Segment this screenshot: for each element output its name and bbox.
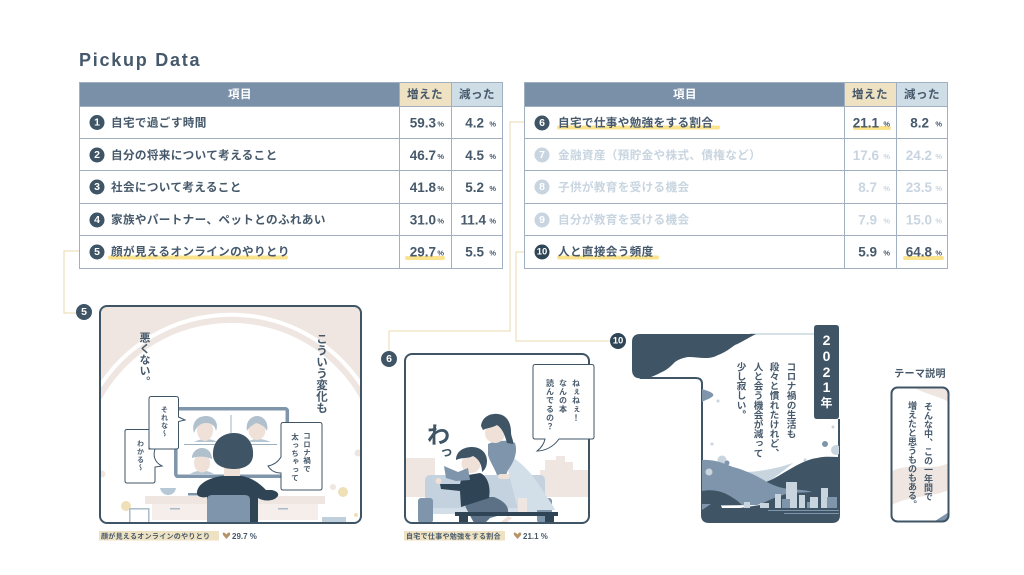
tab: 2021年 bbox=[814, 325, 839, 419]
row 5: 顔が見えるオンラインのやりとり bbox=[111, 244, 290, 258]
panel: theme bbox=[892, 367, 949, 522]
row 4: 31.0 bbox=[410, 212, 436, 228]
cup bbox=[518, 498, 527, 512]
speech bubble: なんの本 bbox=[558, 379, 568, 414]
speech bubble: わかる bbox=[125, 430, 162, 483]
desk bbox=[145, 496, 325, 520]
tab: 2021年: 年 bbox=[820, 395, 833, 410]
speech bubble: 読んでるの？ bbox=[546, 378, 554, 431]
badge 6 bbox=[381, 351, 397, 367]
row 1: % bbox=[437, 120, 444, 128]
speech bubble: ねぇねぇ！ bbox=[572, 379, 580, 422]
tab: 2021年: 0 bbox=[823, 348, 831, 364]
row 4: % bbox=[437, 216, 444, 226]
row 8: 子供が教育を受ける機会 bbox=[558, 180, 689, 194]
tab: 2021年: 2 bbox=[823, 332, 831, 348]
row 5 bbox=[90, 244, 496, 260]
speech bubble: それな bbox=[149, 396, 185, 449]
row 10 bbox=[534, 244, 942, 260]
row 3: % bbox=[489, 184, 496, 193]
connector lines bbox=[64, 122, 610, 351]
badge 6: 6 bbox=[386, 353, 392, 365]
highlight: rows 6 and 10 bbox=[557, 126, 944, 260]
table: left bbox=[80, 82, 502, 268]
row 6: 21.1 bbox=[853, 116, 879, 130]
row 10: % bbox=[935, 248, 942, 258]
table: right: 項目 bbox=[673, 88, 697, 101]
table: left: 項目 bbox=[228, 88, 252, 101]
tab: 2021年: 1 bbox=[823, 379, 831, 395]
decorative dots bbox=[101, 470, 106, 478]
caption: 顔が見えるオンラインのやりとり bbox=[101, 532, 210, 540]
row 1: % bbox=[489, 120, 496, 128]
row 6: 8.2 bbox=[910, 116, 929, 130]
row 5: % bbox=[489, 248, 496, 258]
row 8: % bbox=[935, 184, 942, 193]
landscape bbox=[702, 456, 840, 523]
narration text bbox=[734, 361, 796, 458]
speech bubble: それな: それな〜 bbox=[160, 406, 168, 437]
caption: 29.7 % bbox=[232, 532, 257, 541]
narration: こういう変化も: こういう変化も bbox=[315, 333, 328, 414]
row 7: 24.2 bbox=[906, 148, 932, 163]
side box bbox=[130, 509, 149, 525]
row 9: 7.9 bbox=[858, 212, 877, 228]
child bbox=[436, 447, 512, 523]
row 1: 4.2 bbox=[465, 116, 484, 130]
row 10: 10 bbox=[537, 246, 547, 258]
bowl bbox=[160, 488, 176, 495]
row 4 bbox=[90, 212, 496, 228]
row 2: 4.5 bbox=[465, 148, 484, 163]
narration text: 人と会う機会が減って bbox=[752, 362, 763, 458]
row 9: % bbox=[883, 216, 890, 226]
row 10: % bbox=[883, 248, 890, 258]
table: right: 増えた bbox=[852, 87, 888, 101]
dark cloud blob bbox=[632, 334, 756, 378]
speech bubble: わかる: わかる〜 bbox=[136, 440, 144, 471]
speech bubble bbox=[533, 364, 594, 451]
caption: 21.1 % bbox=[523, 532, 548, 541]
row 1 bbox=[90, 115, 496, 130]
beige skyline bbox=[405, 456, 589, 497]
narration text: 段々と慣れたけれど、 bbox=[768, 361, 779, 458]
badge 10: 10 bbox=[613, 336, 623, 346]
row 6: 自宅で仕事や勉強をする割合 bbox=[558, 116, 713, 130]
row 7: 7 bbox=[539, 149, 545, 161]
narration: 悪くない。: 悪くない。 bbox=[138, 332, 150, 387]
narration text: 少し寂しい。 bbox=[734, 361, 746, 420]
table: left: 減った bbox=[459, 87, 495, 101]
row 6: % bbox=[935, 120, 942, 128]
badge 5 bbox=[76, 304, 92, 320]
theme text: そんな中、この一年間で bbox=[923, 402, 933, 501]
row 5: 5 bbox=[94, 246, 100, 258]
row 2: % bbox=[489, 152, 496, 161]
row 8: % bbox=[883, 184, 890, 193]
row 9: 9 bbox=[539, 214, 545, 226]
row 7 bbox=[534, 148, 942, 163]
caption: 自宅で仕事や勉強をする割合 bbox=[406, 532, 501, 540]
row 4: 11.4 bbox=[460, 212, 486, 228]
row 8: 8.7 bbox=[858, 180, 877, 195]
row 10: 64.8 bbox=[906, 244, 932, 260]
row 7: 17.6 bbox=[853, 148, 879, 163]
row 7: % bbox=[883, 152, 890, 161]
panel: manga 5 bbox=[76, 304, 362, 541]
row 6: % bbox=[883, 120, 890, 128]
row 3: 41.8 bbox=[410, 180, 436, 195]
row 3: % bbox=[437, 184, 444, 193]
row 2: 自分の将来について考えること bbox=[111, 148, 278, 162]
frame bbox=[405, 354, 589, 523]
row 3 bbox=[90, 180, 496, 195]
caption bbox=[99, 531, 257, 541]
sound effect: わっ: わ bbox=[427, 422, 450, 448]
row 9 bbox=[534, 212, 942, 228]
badge 5: 5 bbox=[81, 306, 87, 318]
row 2: % bbox=[437, 152, 444, 161]
caption bbox=[404, 531, 548, 541]
monitor bbox=[176, 409, 287, 476]
badge 10 bbox=[610, 333, 626, 349]
row 6: 6 bbox=[539, 117, 545, 129]
coffee table bbox=[455, 512, 558, 522]
row 8 bbox=[534, 180, 942, 195]
frame bbox=[100, 306, 361, 523]
speech bubble: コロナ禍で: 太っちゃって bbox=[290, 432, 300, 482]
row 1: 59.3 bbox=[410, 116, 436, 130]
row 4: 4 bbox=[94, 214, 100, 226]
row 2 bbox=[90, 148, 496, 163]
row 2: 2 bbox=[94, 149, 100, 161]
theme text bbox=[907, 400, 933, 509]
row 9: % bbox=[935, 216, 942, 226]
table: right: 減った bbox=[904, 87, 940, 101]
highlight: row 5 bbox=[108, 256, 445, 260]
row 8: 8 bbox=[539, 181, 545, 193]
panel: manga 6 bbox=[381, 351, 594, 541]
row 8: 23.5 bbox=[906, 180, 932, 195]
row 6 bbox=[534, 116, 942, 130]
row 5: % bbox=[437, 248, 444, 258]
row 4: % bbox=[489, 216, 496, 226]
woman bbox=[481, 414, 555, 510]
tab: 2021年: 2 bbox=[823, 364, 831, 380]
row 9: 15.0 bbox=[906, 212, 932, 228]
row 1: 自宅で過ごす時間 bbox=[111, 116, 207, 130]
person from behind bbox=[197, 433, 278, 524]
theme text: 増えたと思うものもある。 bbox=[907, 400, 917, 509]
table: left: 増えた bbox=[407, 87, 443, 101]
row 4: 家族やパートナー、ペットとのふれあい bbox=[111, 212, 326, 226]
row 3: 5.2 bbox=[465, 180, 484, 195]
row 3: 社会について考えること bbox=[111, 180, 242, 194]
narration text: コロナ禍の生活も bbox=[784, 362, 796, 439]
speech bubble: コロナ禍で bbox=[268, 422, 322, 490]
row 7: 金融資産（預貯金や株式、債権など） bbox=[558, 148, 761, 162]
table: right bbox=[524, 82, 948, 268]
row 2: 46.7 bbox=[410, 148, 436, 163]
row 5: 29.7 bbox=[410, 244, 436, 260]
row 3: 3 bbox=[94, 181, 100, 193]
speech bubble: コロナ禍で: コロナ禍で bbox=[302, 432, 312, 473]
panel: manga 10 bbox=[610, 325, 841, 523]
sound effect: わっ: っ bbox=[440, 444, 453, 459]
sound effect: わっ bbox=[427, 422, 453, 459]
sofa bbox=[418, 475, 552, 523]
city buildings bbox=[744, 482, 839, 514]
row 5: 5.5 bbox=[465, 244, 484, 260]
row 10: 人と直接会う頻度 bbox=[558, 244, 654, 258]
row 10: 5.9 bbox=[858, 244, 877, 260]
title: Pickup Data bbox=[79, 50, 201, 70]
row 1: 1 bbox=[94, 116, 100, 128]
theme heading: テーマ説明 bbox=[894, 367, 946, 380]
row 7: % bbox=[935, 152, 942, 161]
row 9: 自分が教育を受ける機会 bbox=[558, 212, 689, 226]
